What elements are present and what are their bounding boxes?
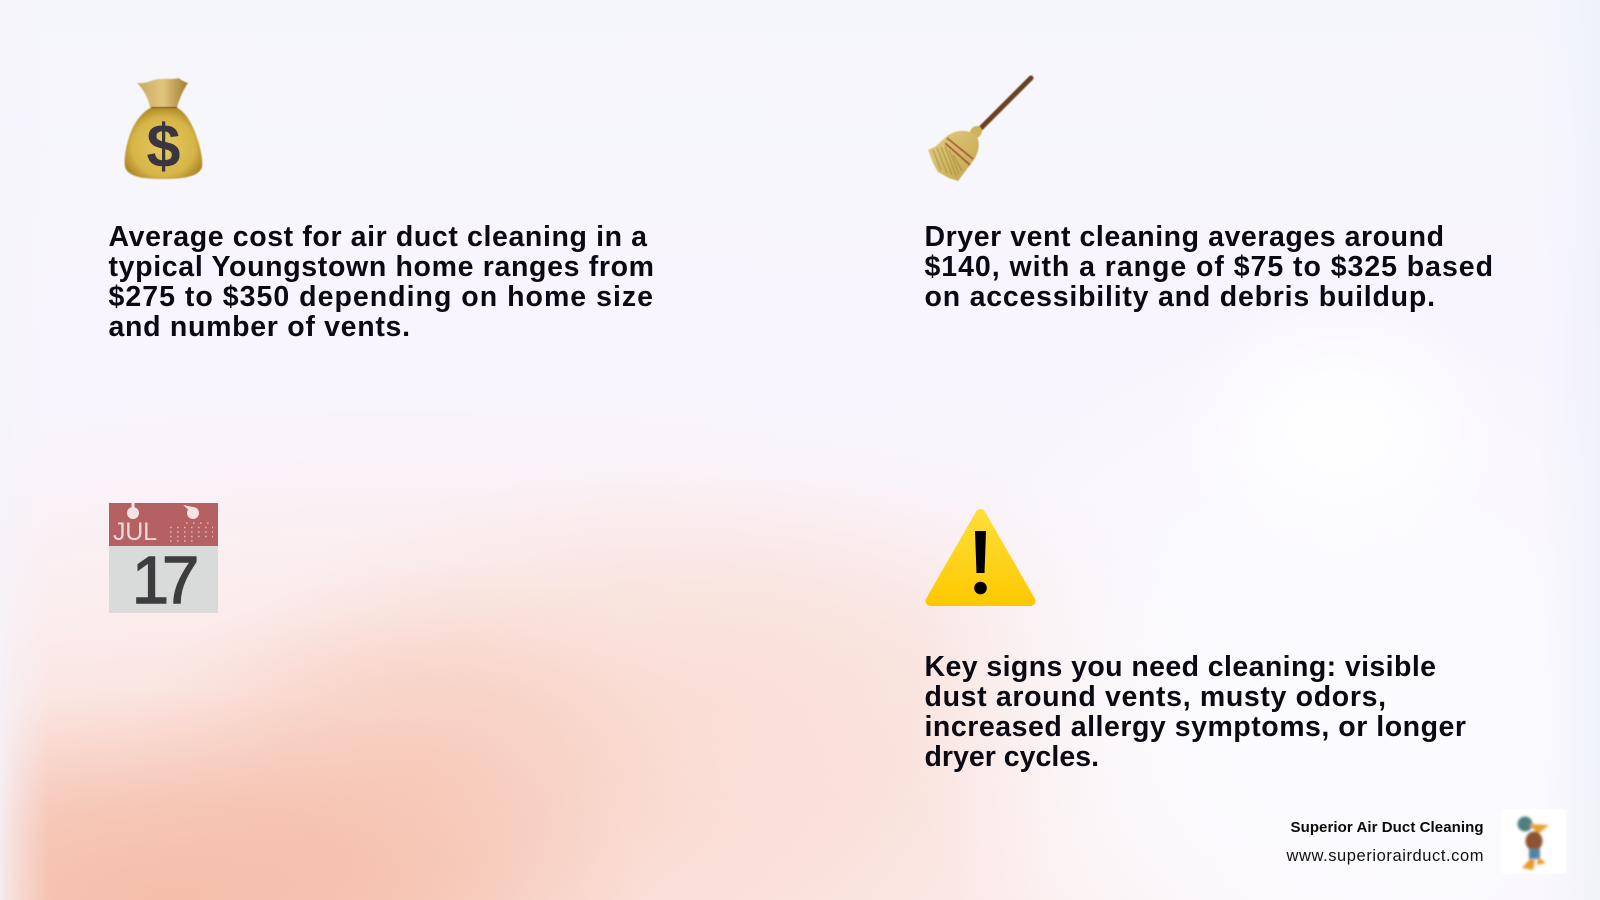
text block: key signs: Key signs you need cleaning: visible xyxy=(924,651,1436,683)
text block: dryer xyxy=(924,221,1493,313)
panel: air duct cost xyxy=(108,78,654,343)
text block: cost: typical Youngstown home ranges from xyxy=(108,251,654,283)
brand name: Superior Air Duct Cleaning xyxy=(1290,819,1484,836)
panel: key signs xyxy=(924,514,1466,773)
text block: cost: Average cost for air duct cleaning in a xyxy=(108,221,648,253)
text block: dryer: Dryer vent cleaning averages around xyxy=(924,221,1444,253)
panel: dryer vent xyxy=(924,78,1493,313)
icon: money bag xyxy=(125,78,202,179)
website: www.superiorairduct.com xyxy=(1286,847,1484,865)
icon: broom xyxy=(928,78,1031,181)
text block: key signs xyxy=(924,651,1466,773)
text block: cost: and number of vents. xyxy=(108,311,410,343)
text block: key signs: increased allergy symptoms, or longer xyxy=(924,711,1466,743)
text block: dryer: on accessibility and debris buildup. xyxy=(924,281,1435,313)
icon: warning triangle xyxy=(930,514,1030,601)
icon: calendar: JUL xyxy=(113,518,157,546)
text block: dryer: $140, with a range of $75 to $325 based xyxy=(924,251,1493,283)
icon: calendar: 17 xyxy=(132,543,196,618)
icon: calendar xyxy=(109,503,218,618)
dollar sign: $ xyxy=(147,112,181,180)
text block: cost: $275 to $350 depending on home size xyxy=(108,281,653,313)
footer: brand xyxy=(1286,809,1566,874)
panel: calendar xyxy=(109,503,218,618)
text block: key signs: dryer cycles. xyxy=(924,741,1099,773)
text block: cost xyxy=(108,221,654,343)
logo xyxy=(1501,809,1566,874)
text block: key signs: dust around vents, musty odors, xyxy=(924,681,1386,713)
